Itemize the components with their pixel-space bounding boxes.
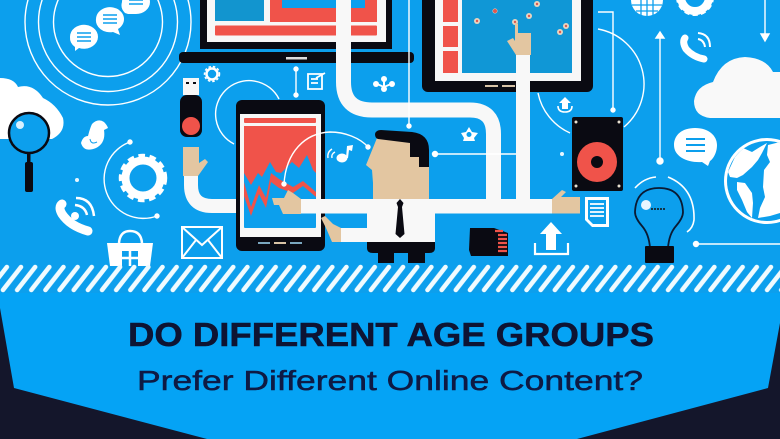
icon: speaker bbox=[572, 117, 623, 191]
icon: network bbox=[373, 76, 395, 92]
left arm and raised hand bbox=[183, 147, 238, 206]
icon: upload small bbox=[558, 97, 572, 112]
laptop bbox=[179, 0, 414, 63]
icon: magnifier bbox=[9, 113, 49, 192]
phablet with chart bbox=[236, 100, 325, 251]
trousers bbox=[367, 242, 435, 263]
thin connector lines bbox=[104, 0, 780, 246]
pointing hand bbox=[272, 190, 301, 214]
icon: memory card bbox=[469, 228, 508, 256]
icon: small gear bbox=[204, 66, 220, 82]
thin arc over tablet to head bbox=[282, 132, 370, 186]
icon: chat bubble right bbox=[674, 128, 717, 166]
dot bbox=[560, 152, 564, 156]
subtitle: Prefer Different Online Content? bbox=[137, 365, 643, 396]
icon: gear top bbox=[678, 0, 712, 14]
icon: cloud left bbox=[0, 78, 64, 139]
icon: upload bbox=[535, 222, 568, 254]
white pipe arm from laptop bbox=[344, 0, 494, 206]
icon: star bbox=[461, 127, 478, 141]
concentric circles with chat bubbles bbox=[25, 0, 191, 105]
icon: bird bbox=[81, 120, 108, 150]
man's horizontal arm and right hand bbox=[301, 190, 580, 214]
title: DO DIFFERENT AGE GROUPS bbox=[128, 316, 654, 353]
icon: notes bbox=[308, 73, 325, 89]
icon: globe top bbox=[631, 0, 663, 16]
tablet right bbox=[422, 0, 593, 92]
icon: cloud right bbox=[694, 57, 780, 118]
striped divider band bbox=[0, 263, 780, 294]
tie bbox=[396, 199, 404, 238]
icon: document bbox=[585, 197, 609, 227]
icon: music note bbox=[328, 145, 353, 162]
icon: phone with waves left bbox=[60, 198, 94, 231]
tablet arm right bbox=[507, 22, 531, 205]
lower hand bbox=[321, 216, 341, 242]
head and neck bbox=[366, 138, 429, 200]
lower banner background bbox=[0, 293, 780, 439]
icon: gear bbox=[121, 156, 165, 200]
icon: usb drive bbox=[180, 78, 202, 137]
shirt bbox=[367, 199, 435, 242]
icon: envelope bbox=[182, 227, 222, 258]
hair bbox=[375, 130, 429, 167]
dark corner shape right bbox=[577, 323, 780, 439]
icon: shopping basket bbox=[107, 231, 153, 266]
dark corner shape left bbox=[0, 308, 207, 439]
icon: light bulb bbox=[635, 177, 694, 263]
icon: globe bbox=[724, 138, 780, 224]
icon: phone with waves right bbox=[684, 33, 710, 59]
man bbox=[272, 130, 435, 263]
dot bbox=[75, 178, 79, 182]
